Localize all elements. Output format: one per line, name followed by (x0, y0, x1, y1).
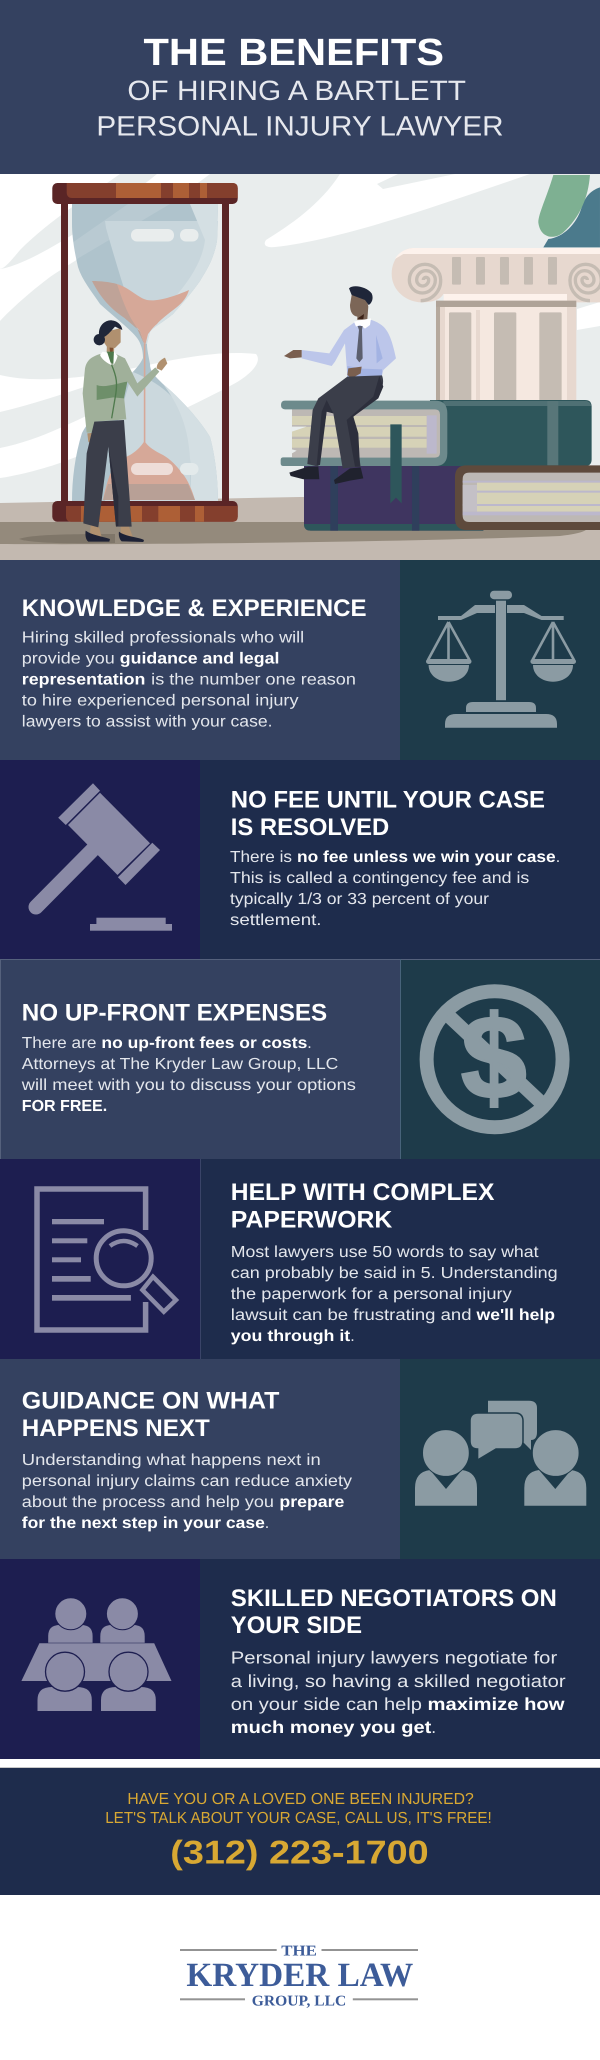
body text: There are (22, 1035, 97, 1052)
woman figure (83, 335, 167, 542)
body text: . (265, 1515, 269, 1532)
cta text line 2: LET'S TALK ABOUT YOUR CASE, CALL US, IT'S FREE! (105, 1810, 492, 1827)
body text: provide you (22, 650, 115, 667)
body text: guidance and legal (120, 650, 279, 667)
icon: crossed-out dollar (427, 991, 563, 1127)
body text: a living, so having a skilled negotiator (231, 1671, 566, 1691)
body text (230, 849, 560, 929)
body text: will meet with you to discuss your options (21, 1077, 356, 1094)
subtitle line 2: PERSONAL INJURY LAWYER (96, 111, 504, 142)
body text: prepare (279, 1494, 345, 1511)
body text: to hire experienced personal injury (22, 692, 299, 709)
illustration: hourglass, lawyers, books and column (0, 174, 600, 560)
body text: much money you get (231, 1717, 431, 1737)
body text: settlement. (230, 912, 322, 929)
logo: the kryder law group: KRYDER LAW (186, 1957, 413, 1994)
body text: for the next step in your case (22, 1515, 265, 1532)
body text: about the process and help you (22, 1494, 274, 1511)
panel: knowledge and experience (0, 560, 600, 760)
panel: no fee until case is resolved (0, 760, 600, 959)
heading: NO UP-FRONT EXPENSES (22, 1000, 327, 1027)
body text: . (307, 1035, 312, 1052)
heading: PAPERWORK (231, 1207, 393, 1234)
header (0, 0, 600, 174)
panel: guidance on what happens next (0, 1359, 600, 1559)
body text: representation (22, 671, 145, 688)
man figure (284, 286, 396, 484)
logo: the kryder law group: GROUP, LLC (252, 1993, 346, 2009)
body text: . (431, 1717, 436, 1737)
icon: gavel (36, 783, 172, 931)
body text: Understanding what happens next in (22, 1452, 321, 1469)
body text: no up-front fees or costs (101, 1035, 307, 1052)
teal book (281, 400, 592, 466)
sand (92, 281, 195, 500)
call to action banner (0, 1767, 600, 1895)
woman head (94, 320, 122, 348)
body text (231, 1648, 566, 1737)
plant leaves (538, 175, 600, 247)
heading: NO FEE UNTIL YOUR CASE (231, 786, 545, 813)
heading (231, 1179, 494, 1234)
body text: on your side can help (231, 1694, 422, 1714)
heading: GUIDANCE ON WHAT (22, 1388, 280, 1415)
body text: . (556, 849, 560, 866)
body text: personal injury claims can reduce anxiety (22, 1473, 352, 1490)
icon: crossed-out dollar: $ (461, 992, 527, 1124)
icon: negotiation table (21, 1598, 172, 1711)
body text (21, 1035, 356, 1115)
body text: There is (230, 849, 292, 866)
body text: maximize how (428, 1694, 565, 1714)
body text: the paperwork for a personal injury (231, 1286, 512, 1303)
purple book (304, 466, 483, 531)
top bar (52, 183, 238, 204)
floor (0, 497, 600, 560)
heading: HELP WITH COMPLEX (231, 1179, 494, 1206)
body text: Attorneys at The Kryder Law Group, LLC (22, 1056, 338, 1073)
bottom bar (52, 501, 238, 522)
heading (231, 1585, 557, 1639)
body text: Hiring skilled professionals who will (22, 629, 304, 646)
heading (22, 1388, 280, 1442)
icon: document with magnifier (37, 1189, 176, 1330)
cta text: HAVE YOU OR A LOVED ONE BEEN INJURED? (127, 1791, 474, 1808)
body text: . (350, 1328, 355, 1345)
brown book (455, 465, 600, 530)
heading (231, 786, 545, 841)
hourglass (52, 183, 238, 522)
panel: skilled negotiators on your side (0, 1559, 600, 1759)
body text (22, 629, 356, 730)
body text: typically 1/3 or 33 percent of your (230, 891, 490, 908)
column (392, 248, 600, 401)
subtitle line 1: OF HIRING A BARTLETT (127, 75, 466, 106)
heading: IS RESOLVED (231, 814, 389, 841)
body text: can probably be said in 5. Understanding (231, 1265, 558, 1282)
body text: lawsuit can be frustrating and (231, 1307, 472, 1324)
body text: is the number one reason (151, 671, 356, 688)
body text: FOR FREE. (22, 1098, 107, 1115)
body text (231, 1244, 558, 1345)
heading: HAPPENS NEXT (22, 1415, 210, 1442)
icon: two people talking (415, 1401, 586, 1506)
bookmark (390, 424, 402, 503)
body text: we'll help (475, 1307, 555, 1324)
body text: Personal injury lawyers negotiate for (231, 1648, 557, 1668)
body text: lawyers to assist with your case. (22, 713, 272, 730)
books (281, 400, 600, 531)
body text: Most lawyers use 50 words to say what (231, 1244, 539, 1261)
phone number: (312) 223-1700 (170, 1834, 429, 1871)
panel: help with complex paperwork (0, 1159, 600, 1359)
heading: SKILLED NEGOTIATORS ON (231, 1585, 557, 1612)
body text: This is called a contingency fee and is (230, 870, 529, 887)
logo: the kryder law group: THE (281, 1944, 317, 1960)
body text: no fee unless we win your case (297, 849, 556, 866)
logo: the kryder law group (180, 1944, 418, 2009)
heading: KNOWLEDGE & EXPERIENCE (22, 595, 367, 622)
icon: scales of justice (426, 591, 576, 728)
title: THE BENEFITS (144, 32, 444, 74)
body text: you through it (231, 1328, 351, 1345)
body text (22, 1452, 352, 1532)
heading: YOUR SIDE (231, 1612, 362, 1639)
panel: no up-front expenses (0, 959, 600, 1159)
